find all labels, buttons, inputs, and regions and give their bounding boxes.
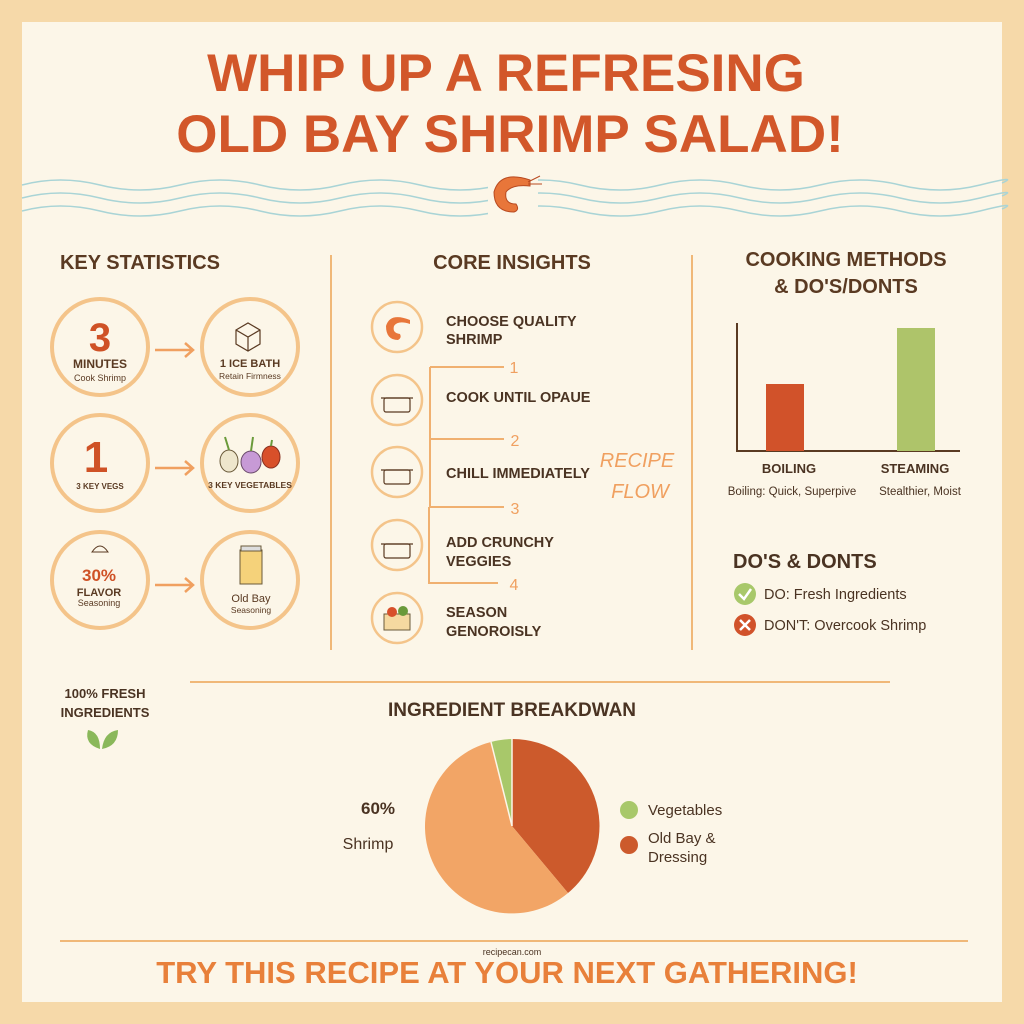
- pie label: 60% shrimp: Shrimp: [343, 836, 393, 853]
- stat: 1: 1: [84, 433, 108, 482]
- do's and don'ts: DO'S & DONTS: [733, 551, 877, 573]
- stat: ice bath: 1 ICE BATH: [220, 358, 280, 370]
- heading: cooking methods: COOKING METHODS: [745, 249, 947, 271]
- stat: 30% flavor: FLAVOR: [77, 587, 121, 599]
- stat: 30% flavor: [77, 546, 121, 608]
- panel: key statistics: [52, 299, 298, 628]
- bar chart: BOILING: [762, 461, 816, 476]
- panel: core insights: 1: [510, 360, 519, 377]
- legend: Old Bay &: [648, 830, 716, 847]
- icon: shrimp: [488, 170, 542, 216]
- pie label: 60% shrimp: 60%: [361, 799, 395, 818]
- stat: old bay: Seasoning: [231, 605, 271, 615]
- heading: ingredient breakdown: INGREDIENT BREAKDWAN: [388, 700, 636, 721]
- label: recipe flow: FLOW: [611, 481, 671, 503]
- do's and don'ts: DO: Fresh Ingredients: [764, 587, 907, 603]
- texts: CHILL IMMEDIATELY: [446, 466, 590, 482]
- stat: 1: [76, 433, 124, 491]
- column dividers: [331, 255, 692, 650]
- title: OLD BAY SHRIMP SALAD!: [176, 105, 844, 164]
- stat: ice bath: Retain Firmness: [219, 371, 281, 381]
- bar chart: STEAMING: [881, 461, 949, 476]
- callout: 100% fresh: INGREDIENTS: [61, 705, 150, 720]
- title: WHIP UP A REFRESING: [207, 44, 805, 103]
- stat: 3 key vegetables: [208, 437, 292, 490]
- stat: 3 key vegetables: 3 KEY VEGETABLES: [208, 480, 292, 490]
- legend: [620, 801, 722, 866]
- legend: Dressing: [648, 849, 707, 866]
- stat: 3 minutes: [73, 316, 127, 383]
- stat: old bay: [231, 546, 271, 615]
- stat: 1: 3 KEY VEGS: [76, 482, 124, 491]
- bar chart: Stealthier, Moist: [879, 486, 962, 498]
- pie chart: [425, 739, 600, 913]
- stat: 3 minutes: MINUTES: [73, 357, 127, 371]
- panel: core insights: 3: [511, 501, 520, 518]
- texts: VEGGIES: [446, 554, 512, 570]
- flow lines: [429, 367, 504, 583]
- texts: SEASON: [446, 605, 507, 621]
- arrows: [155, 343, 193, 592]
- stat: 3 minutes: Cook Shrimp: [74, 373, 126, 383]
- panel: core insights: 2: [511, 433, 520, 450]
- texts: CHOOSE QUALITY: [446, 314, 577, 330]
- bar chart: Boiling: Quick, Superpive: [728, 486, 856, 498]
- heading: cooking methods: [745, 249, 947, 298]
- callout: 100% fresh: [61, 686, 150, 749]
- stat: 30% flavor: Seasoning: [78, 598, 120, 608]
- label: recipe flow: [600, 450, 675, 503]
- stat: old bay: Old Bay: [231, 593, 271, 605]
- heading: key statistics: KEY STATISTICS: [60, 252, 220, 274]
- do's and don'ts: DON'T: Overcook Shrimp: [764, 618, 926, 634]
- heading: cooking methods: & DO'S/DONTS: [774, 276, 918, 298]
- panel: core insights: 4: [510, 577, 519, 594]
- pie label: 60% shrimp: [343, 799, 395, 853]
- stat: 3 minutes: 3: [89, 316, 111, 360]
- label: recipe flow: RECIPE: [600, 450, 675, 472]
- legend: Vegetables: [648, 802, 722, 819]
- stat: 30% flavor: 30%: [82, 566, 116, 585]
- callout: 100% fresh: 100% FRESH: [65, 686, 145, 701]
- texts: [446, 314, 591, 640]
- icons: [386, 317, 410, 340]
- footer: TRY THIS RECIPE AT YOUR NEXT GATHERING!: [156, 955, 858, 990]
- heading: core insights: CORE INSIGHTS: [433, 252, 591, 274]
- texts: COOK UNTIL OPAUE: [446, 390, 591, 406]
- texts: ADD CRUNCHY: [446, 535, 554, 551]
- texts: SHRIMP: [446, 332, 503, 348]
- bar chart: [728, 323, 962, 498]
- stat: ice bath: [219, 323, 281, 381]
- wave decoration: [22, 179, 1008, 216]
- text: recipecan.com: [483, 947, 541, 957]
- title: [176, 44, 844, 164]
- do's and don'ts: [733, 551, 926, 636]
- texts: GENOROISLY: [446, 624, 542, 640]
- panel: core insights: [372, 302, 675, 643]
